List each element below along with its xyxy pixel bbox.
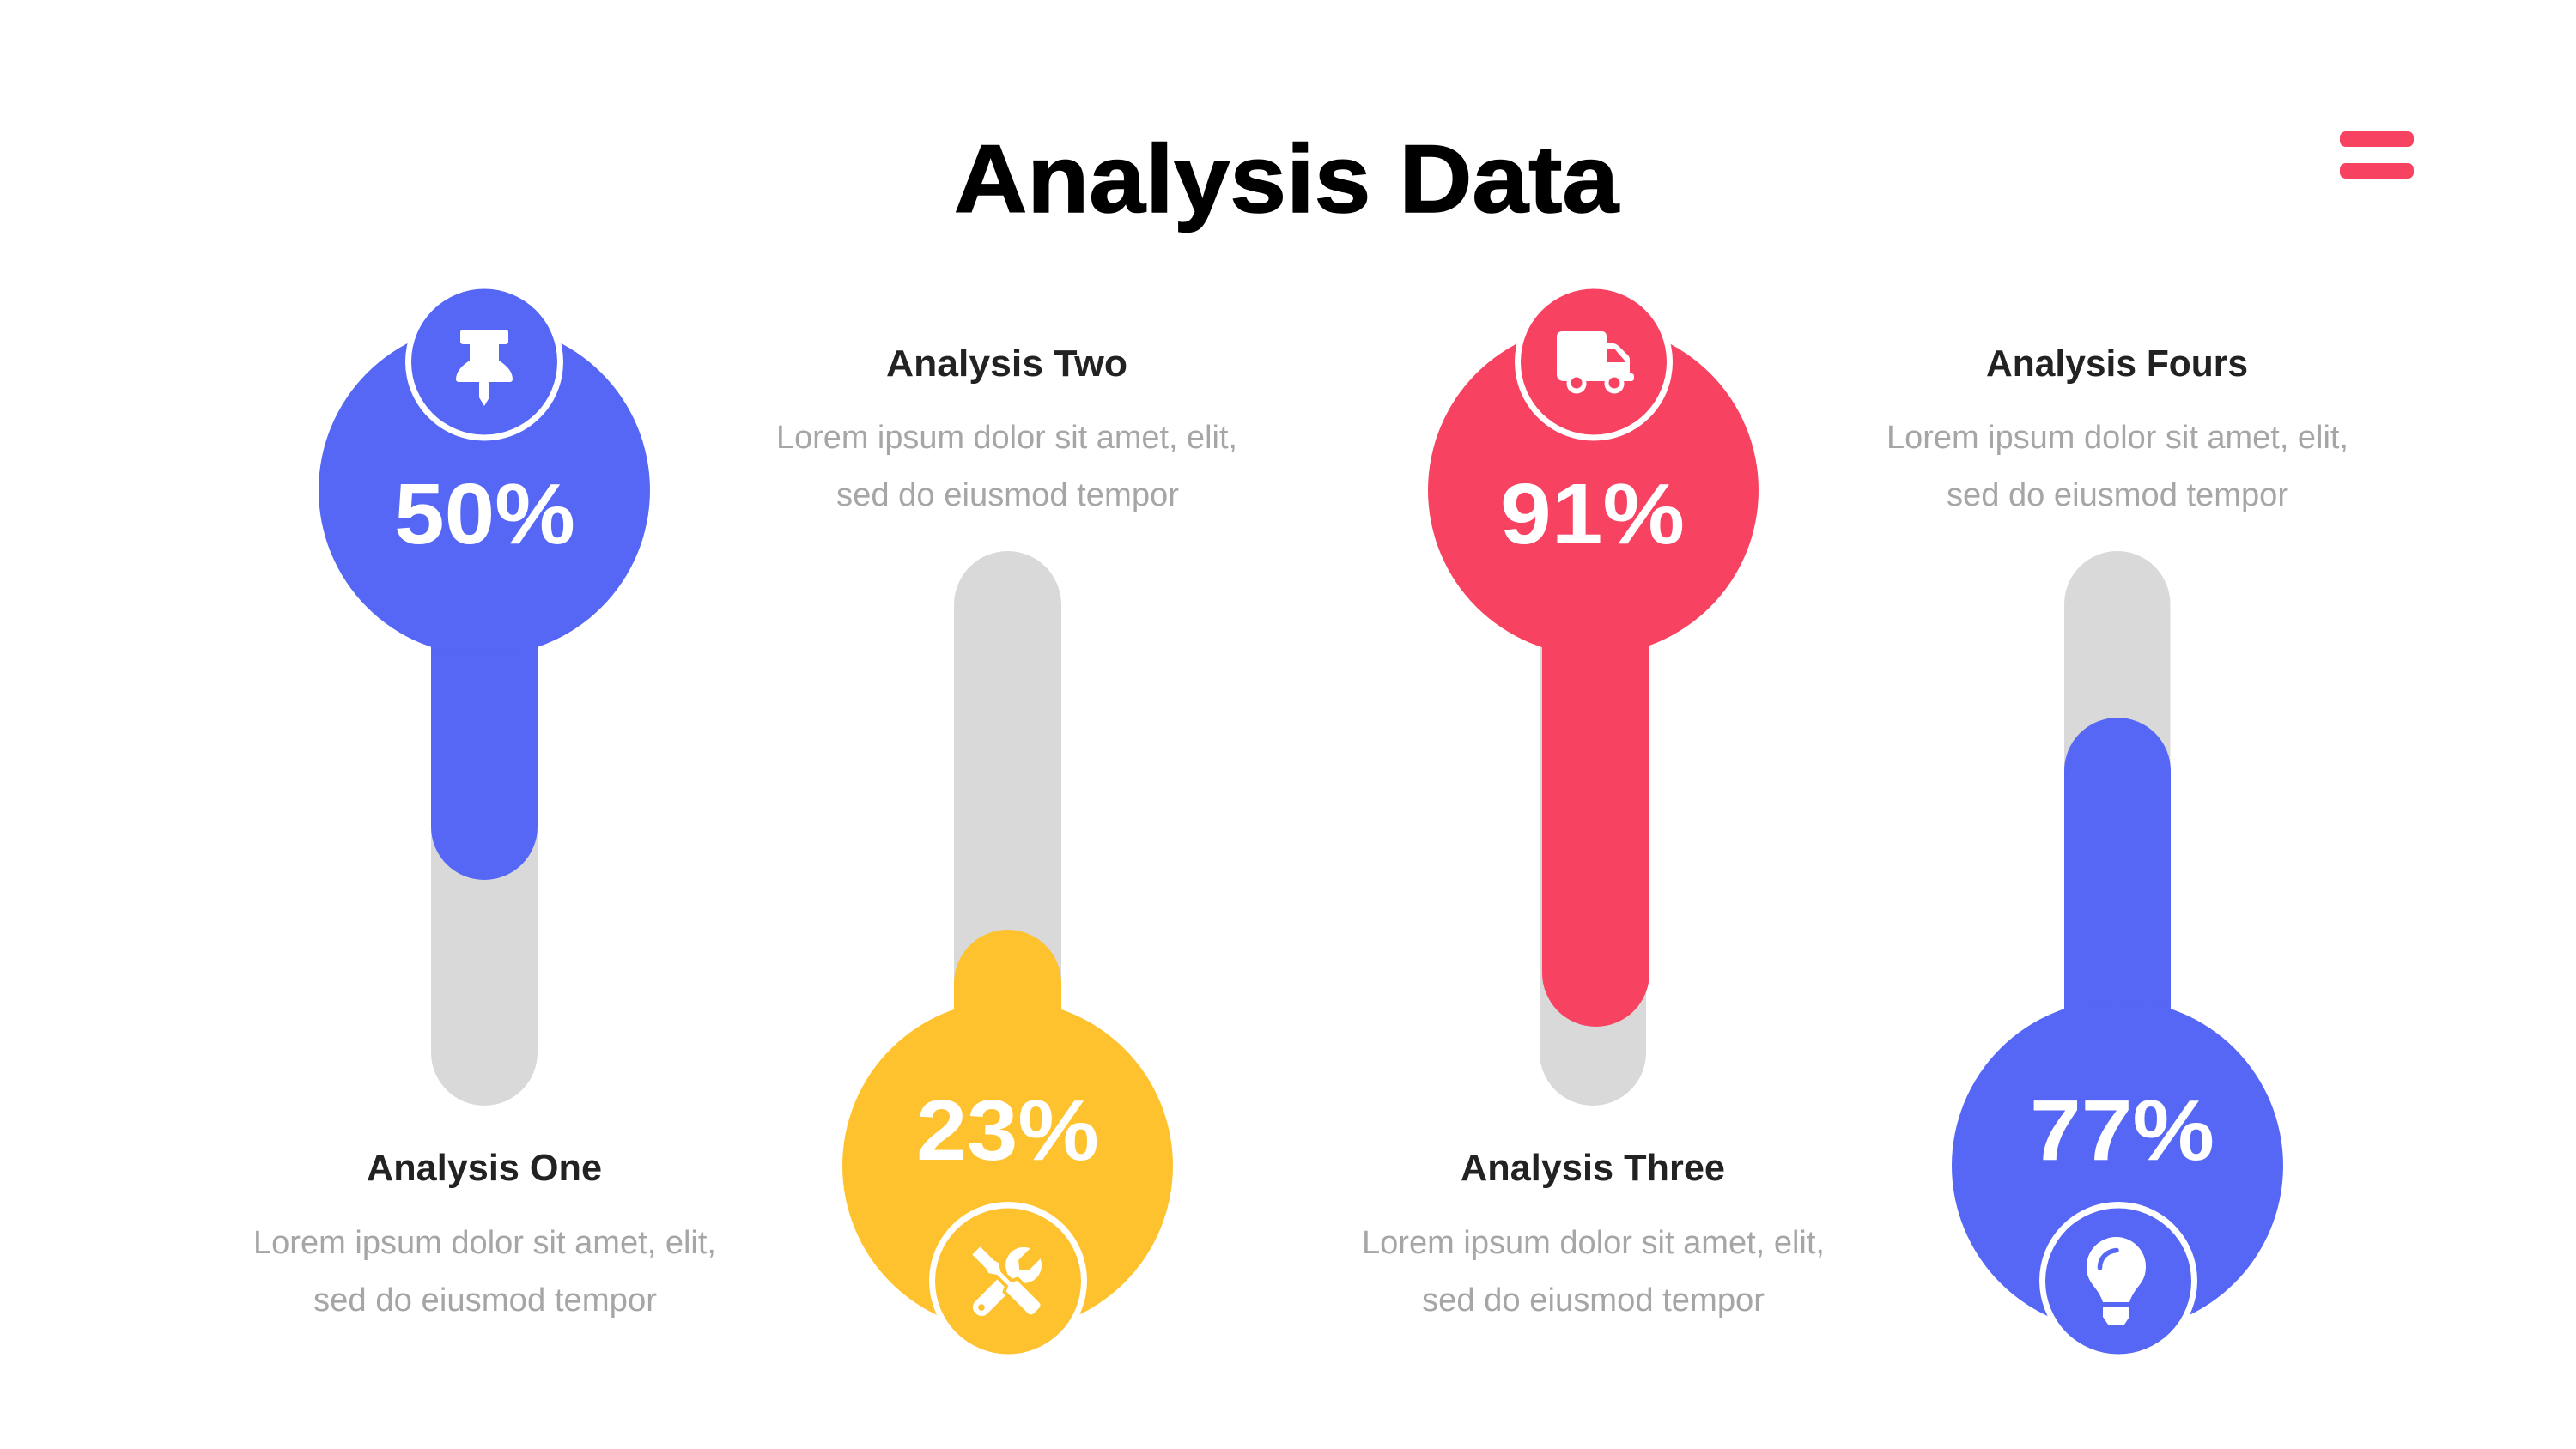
panel: analysis two — [776, 343, 1237, 1360]
track: analysis two — [954, 551, 1061, 1166]
text block: analysis three: sed do eiusmod tempor — [1422, 1282, 1765, 1319]
track: analysis fours — [2064, 551, 2171, 1166]
text block: analysis three — [1362, 1225, 1825, 1319]
text block: analysis two — [776, 420, 1237, 513]
gauge: 50 percent — [319, 283, 650, 880]
value: 23%: 23% — [916, 1082, 1099, 1179]
heading: analysis two: Analysis Two — [886, 343, 1127, 385]
text block: analysis fours: Lorem ipsum dolor sit amet, elit, — [1886, 420, 2348, 456]
gauge: 77 percent — [1952, 718, 2283, 1360]
text block: analysis one: Lorem ipsum dolor sit amet, elit, — [253, 1225, 716, 1261]
track: analysis three — [1540, 551, 1646, 1106]
track: analysis one — [431, 551, 538, 1106]
text block: analysis fours: sed do eiusmod tempor — [1947, 477, 2288, 513]
heading: analysis one: Analysis One — [367, 1147, 602, 1189]
value: 91%: 91% — [1500, 466, 1685, 562]
icon: push pin — [456, 330, 513, 406]
text block: analysis one — [253, 1225, 716, 1319]
text block: analysis one: sed do eiusmod tempor — [313, 1282, 657, 1319]
icon: menu bars — [2340, 131, 2414, 179]
icon: light bulb — [2087, 1237, 2146, 1325]
value: 77%: 77% — [2030, 1082, 2215, 1179]
text block: analysis two: sed do eiusmod tempor — [836, 477, 1179, 513]
gauge: 91 percent — [1428, 283, 1759, 1027]
heading: analysis three: Analysis Three — [1461, 1147, 1725, 1189]
gauge: 23 percent — [842, 930, 1173, 1360]
icon: truck — [1557, 331, 1634, 393]
title: Analysis Data — [954, 125, 1619, 233]
panel: analysis one — [253, 283, 716, 1319]
icon: tools — [963, 1237, 1052, 1326]
text block: analysis fours — [1886, 420, 2348, 513]
value: 50%: 50% — [394, 466, 575, 562]
panel: analysis three — [1362, 283, 1825, 1319]
heading: analysis fours: Analysis Fours — [1986, 343, 2248, 385]
text block: analysis three: Lorem ipsum dolor sit amet, elit, — [1362, 1225, 1825, 1261]
text block: analysis two: Lorem ipsum dolor sit amet, elit, — [776, 420, 1237, 456]
panel: analysis fours — [1886, 343, 2348, 1360]
